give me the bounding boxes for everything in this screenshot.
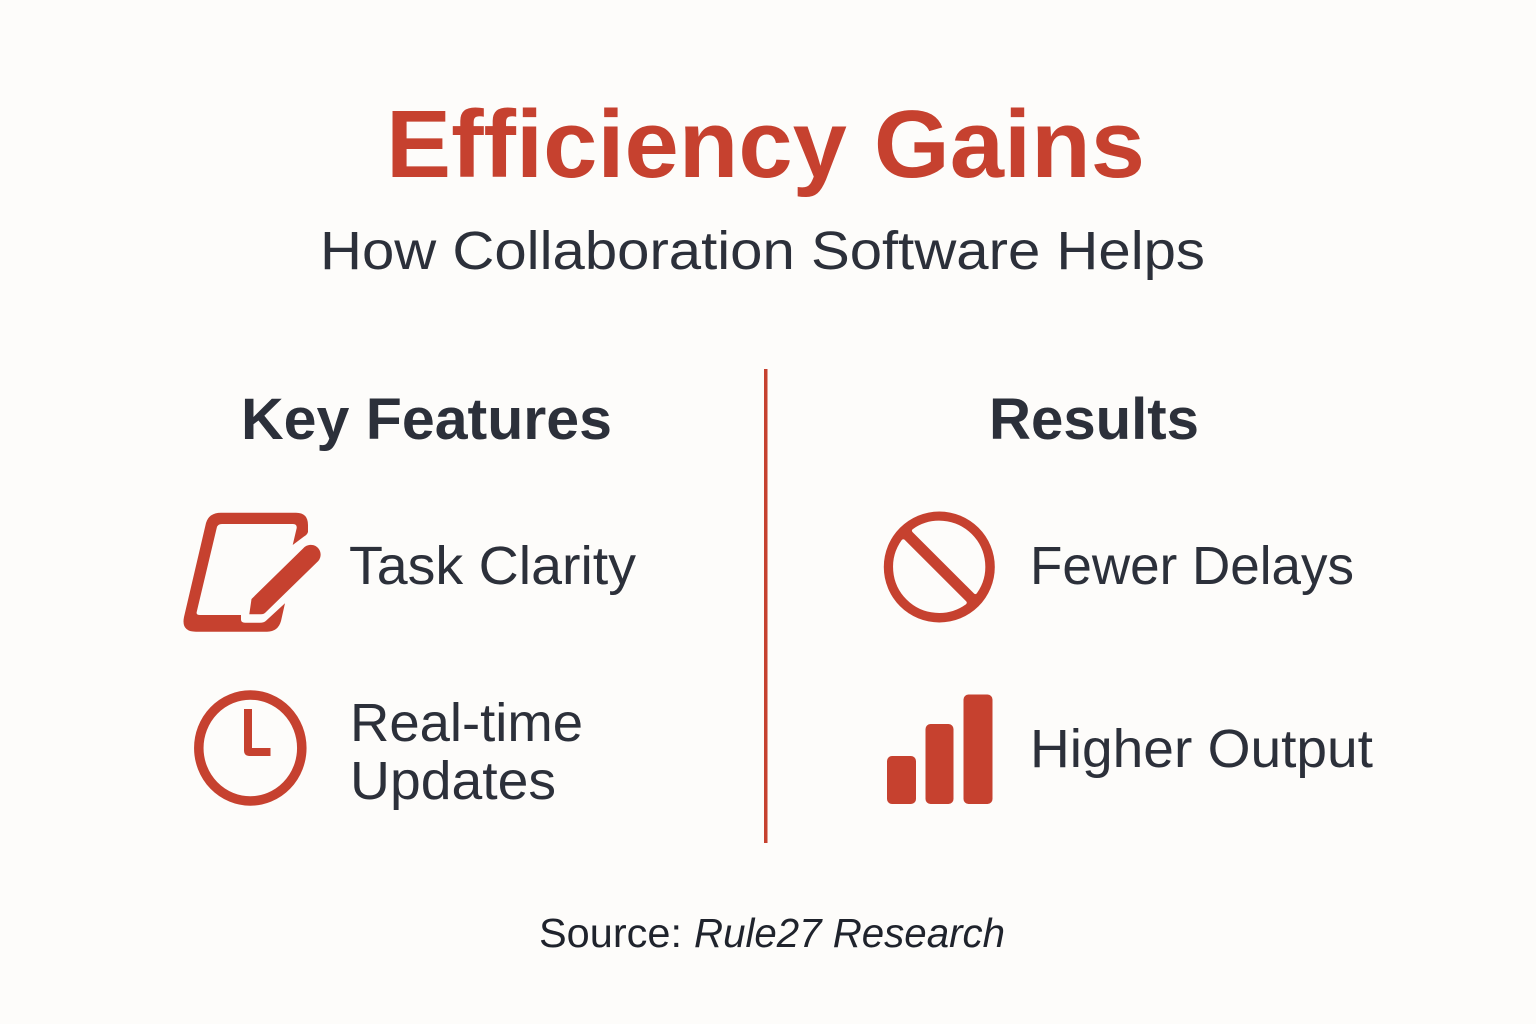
source note: Source:: [539, 910, 682, 956]
label: task clarity: Task Clarity: [349, 536, 636, 596]
panel: results: [884, 387, 1373, 804]
source note: [539, 910, 1005, 956]
icon: clock: [199, 695, 302, 801]
icon: prohibition sign: [884, 512, 995, 622]
panel: key features: [184, 387, 636, 811]
icon: notepad and pencil: [184, 513, 321, 632]
label: higher output: Higher Output: [1030, 719, 1373, 779]
heading: key features: Key Features: [241, 387, 612, 452]
title: Efficiency Gains: [386, 91, 1145, 198]
icon: bar chart: [887, 694, 992, 804]
source note: Rule27 Research: [694, 910, 1005, 956]
label: fewer delays: Fewer Delays: [1030, 536, 1354, 596]
label: real-time updates: Real-time: [350, 693, 583, 753]
label: real-time updates: Updates: [350, 751, 556, 811]
center divider: [764, 369, 768, 843]
label: real-time updates: [350, 693, 583, 811]
heading: results: Results: [989, 387, 1199, 452]
subtitle: How Collaboration Software Helps: [320, 221, 1205, 281]
